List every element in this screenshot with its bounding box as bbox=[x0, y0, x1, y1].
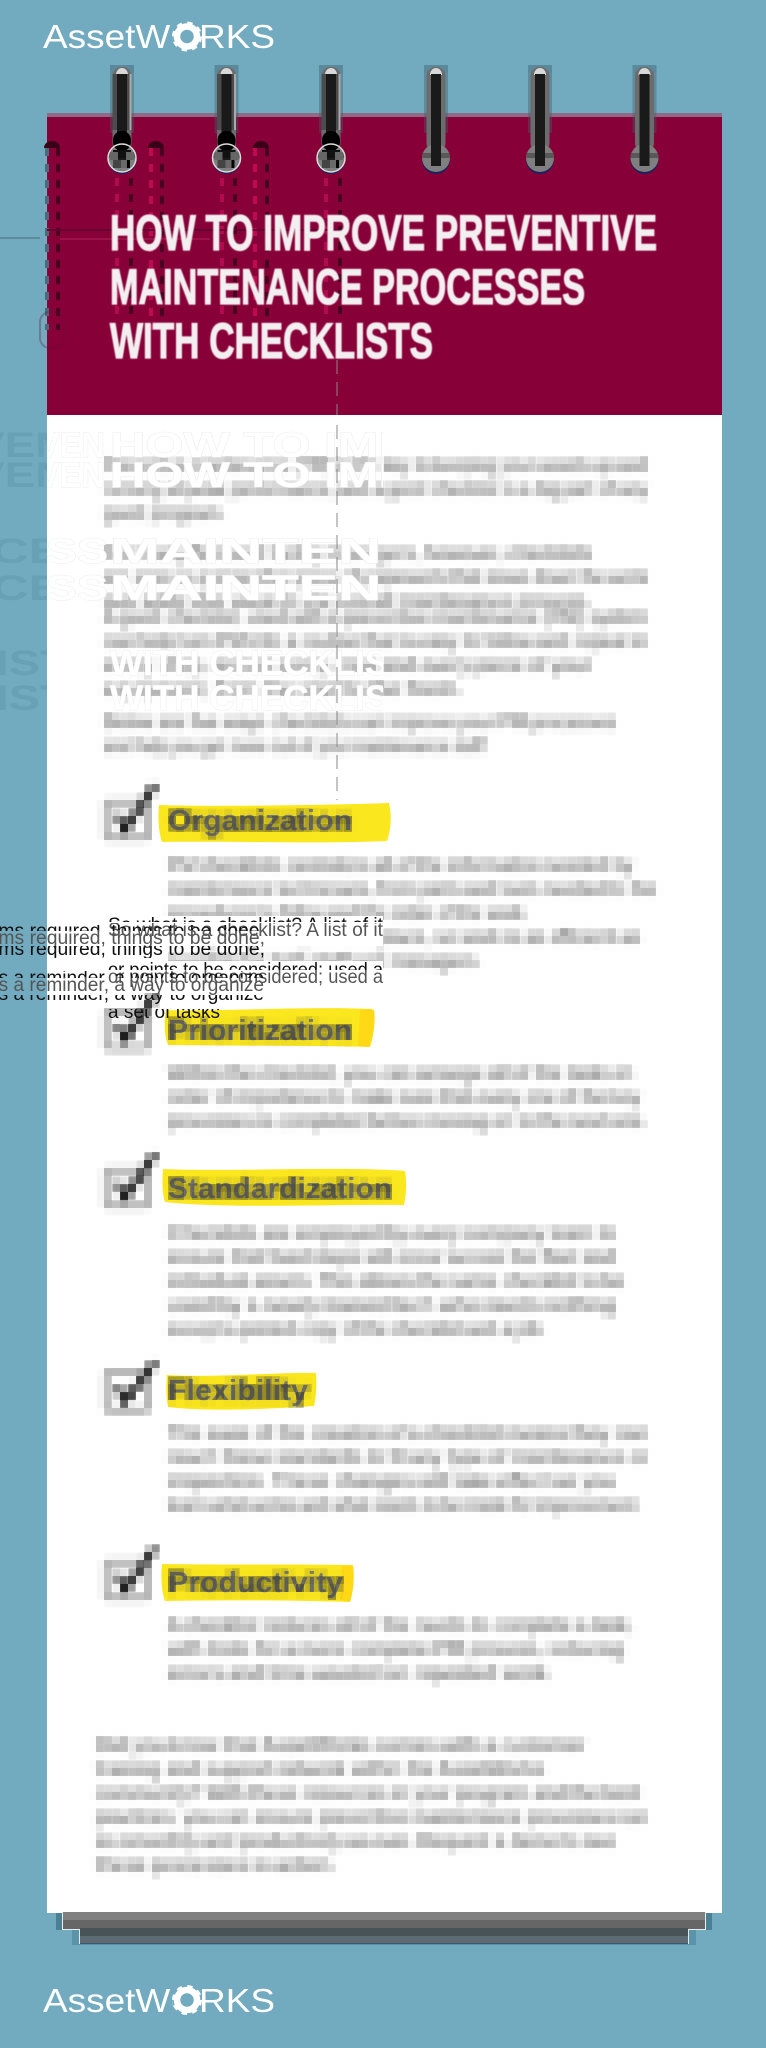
heading: Prioritization bbox=[168, 1015, 352, 1047]
body bbox=[168, 855, 656, 971]
body: A checklist reduces all of the needs to complete a task, bbox=[168, 1615, 633, 1635]
highlight bbox=[162, 1169, 406, 1206]
body: possible for both staff and managers. bbox=[168, 951, 481, 971]
intro text: and adds little value to the overall maintenance process. bbox=[104, 591, 591, 611]
logo: top: AssetWORKS bbox=[43, 18, 275, 55]
closing text bbox=[96, 1735, 647, 1875]
body: maintenance technicians, from parts and tools needed to the bbox=[168, 879, 656, 899]
heading: Productivity bbox=[168, 1567, 343, 1599]
ghost title: left fragments on background bbox=[0, 432, 47, 710]
heading: Organization bbox=[168, 805, 352, 837]
sharp text: what is a checklist: or points to be considered; used a bbox=[108, 960, 383, 981]
header glitch arches bbox=[0, 141, 340, 348]
body bbox=[168, 1223, 624, 1339]
mosaic heading and icon bbox=[106, 1362, 308, 1410]
intro text: every shop, across every crew and every piece of your bbox=[104, 655, 591, 675]
mosaic heading and icon: Flexibility bbox=[168, 1375, 308, 1407]
heading: Flexibility bbox=[168, 1375, 308, 1407]
mosaic heading and icon bbox=[106, 1548, 343, 1599]
intro text: running at peak performance, and a good checklist is a big part of any bbox=[104, 479, 647, 499]
sharp text: what is a checklist: a set of tasks bbox=[108, 1002, 220, 1023]
ghost title: white fragments over text: HOW TO IMPROVE bbox=[110, 426, 550, 465]
intro text: can help turn PM into a routine that is easy to follow and repeat in bbox=[104, 631, 647, 651]
header band bbox=[47, 113, 722, 415]
sharp text: what is a checklist: or points to be considered; used a bbox=[108, 967, 383, 988]
ghost title: white fragments over text: WITH CHECKLISTS bbox=[110, 644, 433, 683]
mosaic heading and icon bbox=[106, 995, 352, 1048]
body: order of importance to make sure that every one of the key bbox=[168, 1087, 640, 1107]
body: ensure that fixed steps will occur across the fleet and bbox=[168, 1247, 615, 1267]
intro text: Preventive maintenance (PM) is the key to keeping your assets up and bbox=[104, 455, 647, 475]
intro text: equipment, from the start to the finish. bbox=[104, 679, 462, 699]
body: inspection. These changes will take effect as you bbox=[168, 1471, 615, 1491]
body bbox=[167, 1615, 633, 1683]
highlight end bbox=[358, 1009, 375, 1047]
sharp text: what is a checklist: So what is a checklist? A list of it bbox=[108, 920, 384, 941]
closing text: practices, you can ensure preventive maintenance processes run bbox=[96, 1807, 647, 1827]
mosaic heading and icon: Productivity bbox=[168, 1567, 343, 1599]
body: with tools for a more complete PM process, reducing bbox=[167, 1639, 624, 1659]
body: Within the checklist, you can arrange all of the tasks in bbox=[168, 1063, 633, 1083]
intro text bbox=[104, 455, 648, 756]
title bbox=[110, 205, 657, 369]
item: Flexibility bbox=[106, 1362, 647, 1515]
mosaic heading and icon: Organization bbox=[168, 805, 352, 837]
bottom binding bbox=[56, 1912, 712, 1945]
closing text: as smoothly and productively as ever. Request a demo to see bbox=[96, 1831, 615, 1851]
item: Prioritization bbox=[106, 995, 647, 1131]
item: Standardization bbox=[106, 1154, 624, 1339]
sharp text: what is a checklist bbox=[0, 915, 384, 1023]
ghost title: white fragments over text: MAINTENANCE bbox=[110, 532, 550, 571]
spiral rings bbox=[108, 65, 658, 174]
body: learn what works and what needs to be made for improvement. bbox=[168, 1495, 640, 1515]
header glitch dashes bbox=[47, 148, 340, 330]
highlight end bbox=[340, 1565, 354, 1602]
body: Checklists are employed by every company team to bbox=[168, 1223, 615, 1243]
item: Productivity bbox=[106, 1548, 633, 1683]
intro text: A good checklist, used with a preventive maintenance (PM) system bbox=[104, 607, 647, 627]
heading: Standardization bbox=[168, 1173, 392, 1205]
vertical guide fragment bbox=[336, 360, 338, 800]
body bbox=[168, 1423, 647, 1515]
body: processes is completed before moving on to the next one. bbox=[168, 1111, 647, 1131]
closing text: these processes in action. bbox=[96, 1855, 336, 1875]
intro text: are seen as just another piece of paperwork that slows down the work bbox=[104, 567, 648, 587]
body: procedures to follow and the order of the work. bbox=[168, 903, 528, 923]
intro text: For many fleet and facility managers, however, checklists bbox=[104, 543, 591, 563]
body: used by a newly-trained tech who needs nothing bbox=[168, 1295, 615, 1315]
highlight bbox=[158, 803, 391, 842]
mosaic heading and icon: Prioritization bbox=[168, 1015, 352, 1047]
notebook page bbox=[47, 415, 722, 1913]
intro text: and help you get more out of your maintenance staff: bbox=[104, 736, 488, 756]
body: errors and time wasted on repeated work. bbox=[168, 1663, 552, 1683]
sharp text: what is a checklist: So what is a checklist? A list of it bbox=[108, 915, 384, 936]
item: Organization bbox=[106, 785, 656, 971]
closing text: training and support network within the AssetWorks bbox=[96, 1759, 544, 1779]
mosaic heading and icon bbox=[106, 785, 352, 838]
intro text: good program. bbox=[104, 503, 225, 523]
highlight bbox=[161, 1564, 353, 1602]
body bbox=[168, 1063, 647, 1131]
body: individual assets. This allows the same checklist to be bbox=[168, 1271, 624, 1291]
ghost title: white fragments over text: MAINTENANCE bbox=[110, 569, 550, 608]
logo: bottom: AssetWORKS bbox=[43, 1982, 275, 2019]
ghost title: white fragments over text bbox=[47, 432, 383, 711]
body: except a printed copy of the checklist and a job. bbox=[168, 1319, 545, 1339]
closing text: Did you know that AssetWorks comes with a customer bbox=[96, 1735, 585, 1755]
mosaic heading and icon bbox=[106, 1154, 392, 1206]
body: PM checklists centralize all of the information needed by bbox=[168, 855, 633, 875]
closing text: community? With these resources in your program and the best bbox=[96, 1783, 640, 1803]
intro text: Below are five ways checklists can improve your PM processes bbox=[104, 712, 615, 732]
ghost title: white fragments over text: HOW TO IMPROVE bbox=[110, 456, 550, 495]
body: reach these standards to fit any type of maintenance or bbox=[168, 1447, 647, 1467]
highlight bbox=[166, 1373, 316, 1410]
body: The ease of the creation of a checklist means they can bbox=[168, 1423, 647, 1443]
title: WITH CHECKLISTS bbox=[110, 313, 433, 369]
cleared band behind sharp text bbox=[47, 916, 383, 993]
highlight bbox=[165, 1008, 374, 1047]
body: Everything is kept in one place, so work is as efficient as bbox=[168, 927, 640, 947]
ghost title: white fragments over text: WITH CHECKLISTS bbox=[110, 679, 433, 718]
mosaic heading and icon: Standardization bbox=[168, 1173, 392, 1205]
